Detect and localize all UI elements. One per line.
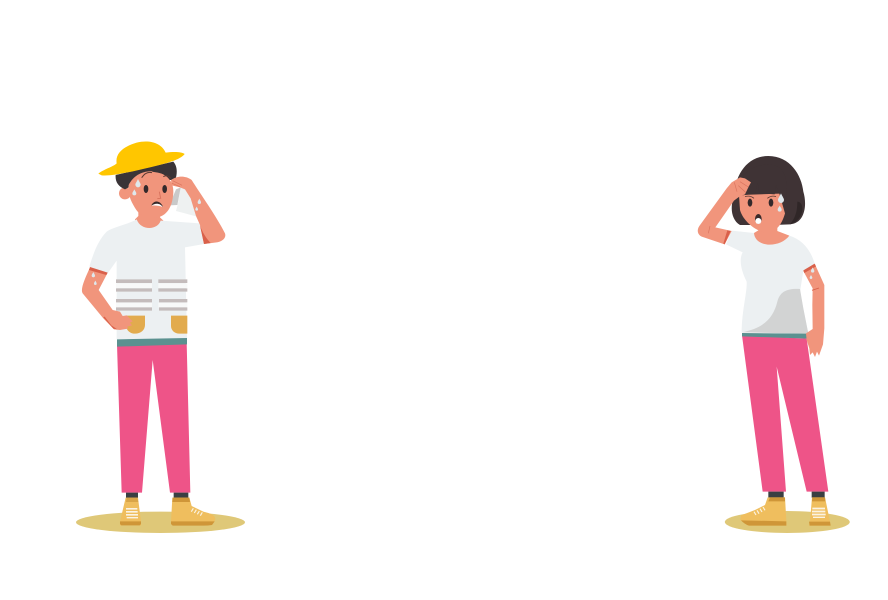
woman sweat drops: [778, 193, 814, 279]
man left arm: [82, 267, 133, 330]
woman mouth: [755, 214, 762, 224]
man legs and shoes: [117, 343, 215, 526]
woman hair back: [732, 156, 805, 225]
woman lowered arm: [803, 264, 824, 357]
man upper body: [82, 142, 225, 347]
woman legs and shoes: [740, 335, 831, 526]
figure: woman with bob haircut: [698, 156, 850, 533]
woman eyes: [748, 199, 752, 207]
woman neck: [754, 225, 789, 247]
woman ground shadow: [725, 511, 850, 533]
woman bangs: [735, 164, 787, 200]
figure: man with yellow hat: [76, 142, 245, 533]
woman upper body: [698, 156, 824, 357]
shirt stripes: [116, 279, 187, 311]
man neck: [135, 210, 163, 232]
woman shirt: [726, 231, 815, 334]
sweat drops: [92, 179, 201, 285]
woman face: [739, 194, 785, 233]
man eyes: [144, 185, 148, 193]
man hat: [98, 142, 185, 176]
man mouth: [151, 201, 163, 207]
towel: [176, 185, 196, 216]
woman waistband: [742, 333, 808, 339]
woman raised arm: [698, 177, 751, 244]
shirt pockets: [126, 316, 187, 334]
man ground shadow: [76, 512, 245, 533]
man shirt: [89, 219, 204, 339]
man head: [119, 187, 131, 199]
waistband: [117, 338, 187, 347]
shirt sweat patch: [742, 289, 808, 334]
man right arm: [171, 177, 225, 244]
